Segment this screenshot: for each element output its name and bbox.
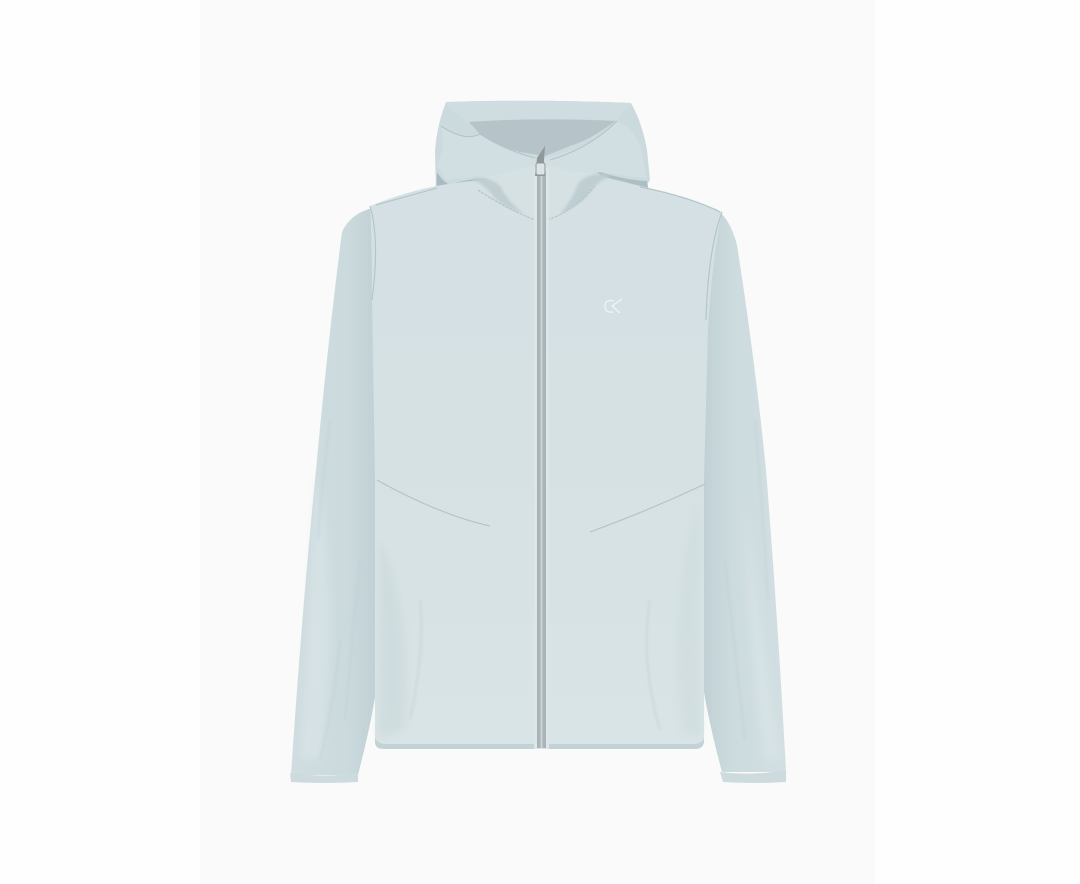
logo mark [605, 299, 622, 313]
hood shadow folds [436, 172, 505, 198]
hood front edge [437, 121, 647, 195]
zipper [534, 146, 549, 749]
hem band [375, 738, 704, 749]
body shading [378, 540, 407, 740]
background panel [200, 0, 875, 884]
left cuff [290, 773, 358, 783]
hood [435, 101, 650, 198]
right cuff [720, 770, 786, 783]
sleeve wrinkles [318, 420, 768, 760]
hood lining mesh [468, 119, 617, 156]
jacket body [300, 121, 780, 760]
zipper pull [535, 146, 545, 176]
left sleeve [290, 208, 385, 783]
seams [370, 121, 722, 532]
collar stand [485, 165, 600, 215]
right sleeve [695, 208, 786, 783]
collar fold shadows [470, 178, 525, 214]
